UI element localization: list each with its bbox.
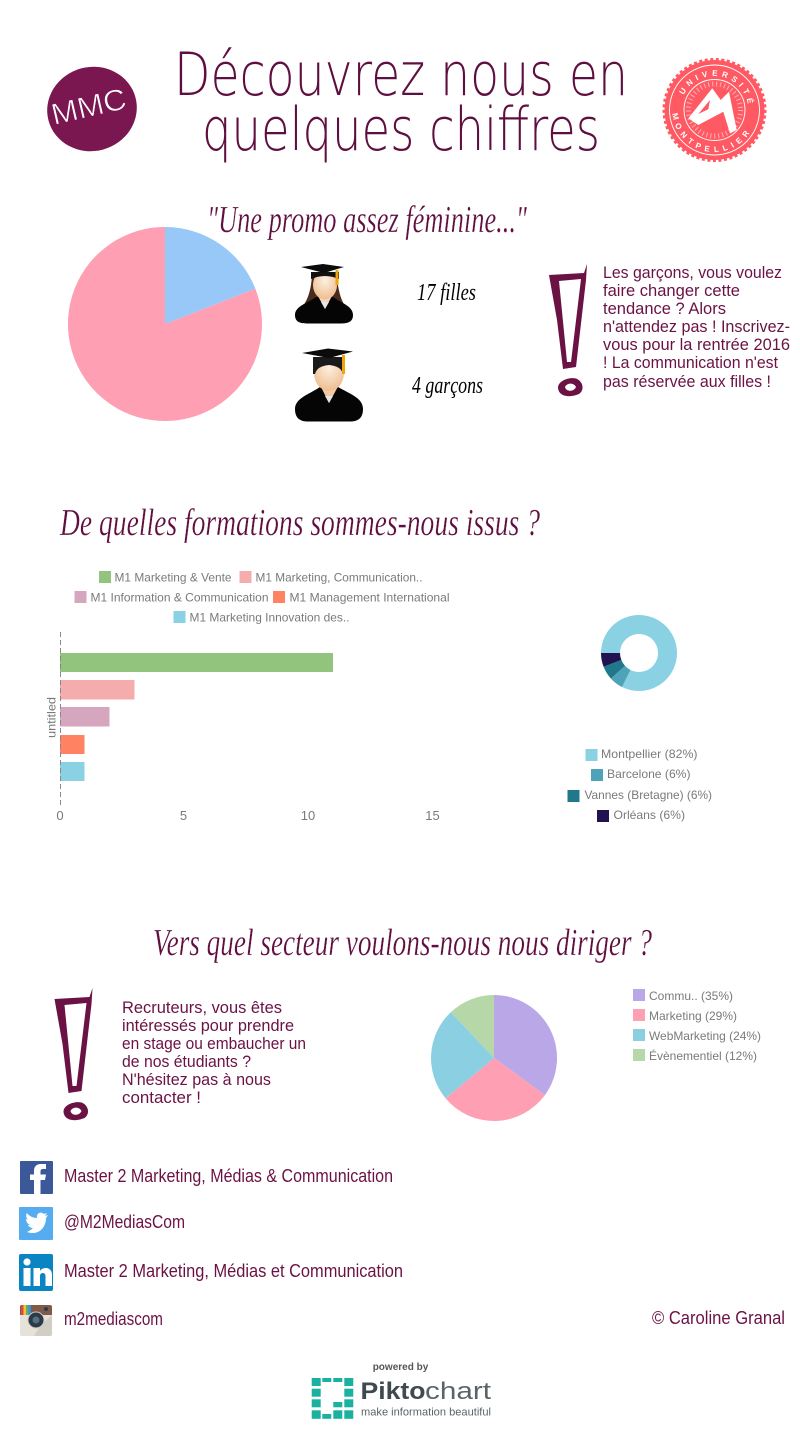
text: message aux recruteurs bbox=[122, 998, 306, 1107]
text: message aux garçons: n'attendez pas ! Inscrivez- bbox=[603, 317, 790, 336]
pie chart: secteurs bbox=[431, 995, 557, 1121]
icon: instagram bbox=[20, 1305, 52, 1336]
icon: facebook bbox=[20, 1161, 53, 1194]
bar chart: formations: 10 bbox=[301, 808, 315, 823]
text: message aux garçons: pas réservée aux filles ! bbox=[603, 372, 771, 391]
text: message aux recruteurs: intéressés pour prendre bbox=[122, 1016, 294, 1035]
title: Découvrez nous en bbox=[174, 40, 628, 110]
label: 4 garçons: 4 garçons bbox=[412, 373, 483, 399]
legend: villes: Vannes (Bretagne) (6%) bbox=[584, 788, 712, 802]
text: message aux garçons: Les garçons, vous voulez bbox=[603, 263, 782, 282]
icon: graduate boy bbox=[295, 348, 363, 422]
legend: formations: M1 Marketing Innovation des.. bbox=[190, 610, 350, 624]
text: credit: © Caroline Granal bbox=[652, 1308, 785, 1328]
icon: linkedin bbox=[19, 1254, 53, 1291]
legend: formations: M1 Marketing & Vente bbox=[114, 570, 232, 584]
text: message aux recruteurs: contacter ! bbox=[122, 1088, 201, 1107]
title: quelques chiffres bbox=[202, 95, 600, 165]
bar chart: formations: 15 bbox=[425, 808, 440, 823]
legend: formations: M1 Management International bbox=[290, 590, 450, 604]
legend: villes: Orléans (6%) bbox=[614, 808, 685, 822]
text: powered by: powered by bbox=[373, 1362, 429, 1373]
text: instagram: m2mediascom bbox=[64, 1309, 163, 1329]
logo: Piktochart wordmark: chart bbox=[425, 1378, 491, 1405]
legend: villes: Montpellier (82%) bbox=[601, 747, 698, 761]
logo: Piktochart wordmark: Pikto bbox=[360, 1378, 426, 1405]
heading: une promo assez féminine: "Une promo assez féminine..." bbox=[207, 199, 528, 241]
heading: formations: De quelles formations sommes-nous issus ? bbox=[59, 502, 540, 544]
pie chart: filles et garçons bbox=[68, 227, 262, 421]
legend: villes: Barcelone (6%) bbox=[607, 767, 690, 781]
text: linkedin: Master 2 Marketing, Médias et Communication bbox=[64, 1261, 403, 1281]
icon: graduate girl bbox=[295, 264, 353, 324]
icon: exclamation mark bbox=[54, 988, 92, 1120]
legend: secteurs: Évènementiel (12%) bbox=[649, 1048, 757, 1063]
text: message aux garçons: tendance ? Alors bbox=[603, 299, 726, 318]
title bbox=[174, 40, 628, 165]
text: message aux recruteurs: Recruteurs, vous êtes bbox=[122, 998, 282, 1017]
logo: Piktochart wordmark bbox=[360, 1378, 491, 1418]
icon: twitter bbox=[19, 1207, 53, 1240]
icon: exclamation mark bbox=[549, 264, 587, 396]
bar chart: formations bbox=[44, 632, 440, 823]
logo: Université de Montpellier seal bbox=[662, 58, 766, 162]
legend: secteurs: Marketing (29%) bbox=[649, 1009, 737, 1023]
bar chart: formations: 5 bbox=[180, 808, 187, 823]
logo: MMC: MMC bbox=[48, 83, 130, 132]
text: message aux garçons: vous pour la rentrée 2016 bbox=[603, 335, 790, 354]
text: message aux recruteurs: de nos étudiants ? bbox=[122, 1052, 251, 1071]
donut chart: villes bbox=[601, 615, 677, 691]
text: message aux garçons: faire changer cette bbox=[603, 281, 740, 300]
text: message aux recruteurs: en stage ou embaucher un bbox=[122, 1034, 306, 1053]
text: twitter: @M2MediasCom bbox=[64, 1212, 185, 1232]
text: message aux garçons: ! La communication n'est bbox=[603, 353, 778, 372]
bar chart: formations: 0 bbox=[56, 808, 64, 823]
label: 17 filles: 17 filles bbox=[417, 280, 476, 306]
legend: formations bbox=[74, 570, 450, 624]
text: message aux recruteurs: N'hésitez pas à nous bbox=[122, 1070, 271, 1089]
legend: secteurs: WebMarketing (24%) bbox=[649, 1029, 761, 1043]
bar chart: formations: untitled bbox=[44, 697, 58, 738]
legend: formations: M1 Marketing, Communication.. bbox=[256, 570, 422, 584]
logo: MMC bbox=[38, 57, 146, 161]
legend: secteurs bbox=[633, 989, 761, 1063]
logo: Piktochart wordmark: make information beautiful bbox=[361, 1406, 491, 1418]
logo: Université de Montpellier seal: MONTPELLIER bbox=[672, 113, 750, 152]
legend: secteurs: Commu.. (35%) bbox=[649, 989, 733, 1003]
text: facebook: Master 2 Marketing, Médias & Communication bbox=[64, 1166, 393, 1186]
logo: Université de Montpellier seal: UNIVERSITÉ bbox=[679, 70, 754, 104]
legend: villes bbox=[568, 747, 712, 822]
text: message aux garçons bbox=[603, 263, 790, 391]
legend: formations: M1 Information & Communication bbox=[90, 590, 268, 604]
logo: Piktochart mark bbox=[312, 1378, 353, 1419]
